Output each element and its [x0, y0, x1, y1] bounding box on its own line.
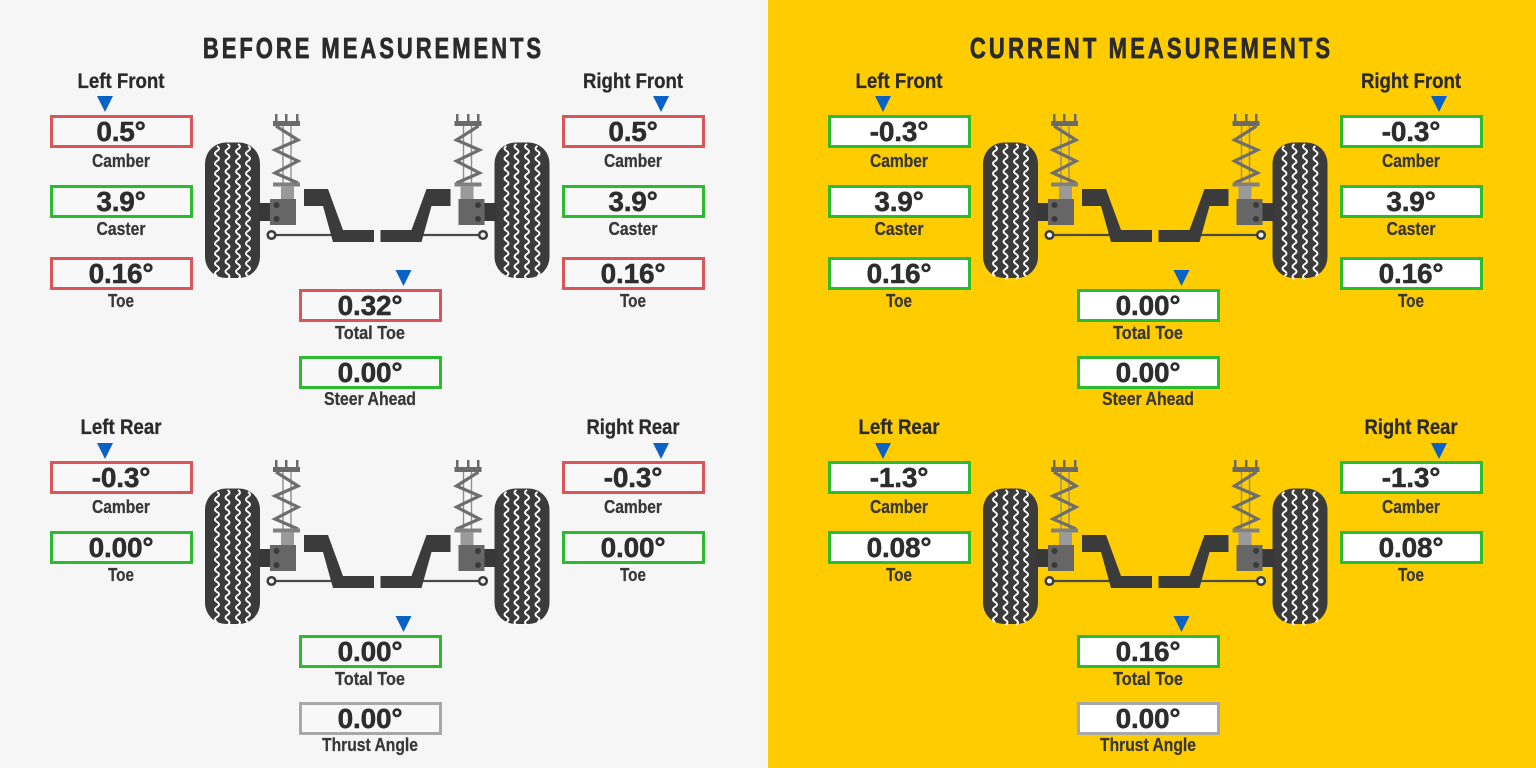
metric: right rear camber: Camber	[1382, 496, 1440, 517]
arrow: right front	[653, 96, 669, 112]
metric: thrust angle: 0.00°	[338, 703, 402, 734]
metric: right front camber: -0.3°	[1382, 116, 1440, 147]
metric: left rear toe: Toe	[108, 564, 134, 585]
illustration: rear axle	[983, 460, 1328, 625]
metric: left front camber: Camber	[870, 150, 928, 171]
metric: right front toe: Toe	[1398, 290, 1424, 311]
metric: left rear camber: -1.3°	[870, 462, 928, 493]
metric: thrust angle: Thrust Angle	[1100, 734, 1196, 755]
metric: right front caster	[564, 186, 704, 239]
metric: steer ahead	[1078, 357, 1218, 409]
metric: left front toe: Toe	[886, 290, 912, 311]
metric: steer ahead: Steer Ahead	[324, 388, 416, 409]
metric: left front caster: Caster	[96, 218, 146, 239]
title: before measurements: BEFORE MEASUREMENTS	[203, 33, 541, 65]
metric: left front caster: Caster	[874, 218, 924, 239]
arrow: left rear	[97, 443, 113, 459]
heading: left front: Left Front	[78, 69, 164, 93]
metric: left rear camber	[52, 462, 192, 517]
metric: steer ahead: 0.00°	[338, 357, 402, 388]
metric: left rear camber	[830, 462, 970, 517]
metric: rear total toe: Total Toe	[1113, 668, 1183, 689]
illustration: rear axle	[205, 460, 550, 625]
metric: front total toe: Total Toe	[1113, 322, 1183, 343]
arrow: rear total toe	[1174, 616, 1190, 632]
metric: right front toe	[1342, 258, 1482, 311]
metric: rear total toe	[300, 636, 440, 689]
metric: right rear toe	[564, 532, 704, 585]
panel: before measurements	[0, 0, 768, 768]
metric: front total toe	[1078, 290, 1218, 343]
arrow: front total toe	[396, 270, 412, 286]
metric: right front camber: 0.5°	[608, 116, 658, 147]
metric: left rear camber: Camber	[92, 496, 150, 517]
metric: right front toe: Toe	[620, 290, 646, 311]
metric: right front caster: 3.9°	[608, 186, 658, 217]
metric: left front caster: 3.9°	[874, 186, 924, 217]
metric: rear total toe: Total Toe	[335, 668, 405, 689]
metric: left front camber	[52, 116, 192, 171]
metric: left rear camber: -0.3°	[92, 462, 150, 493]
metric: steer ahead: Steer Ahead	[1102, 388, 1194, 409]
heading: right rear: Right Rear	[586, 415, 680, 439]
metric: left front caster: 3.9°	[96, 186, 146, 217]
metric: left rear toe: 0.08°	[867, 532, 931, 563]
metric: right front camber	[1342, 116, 1482, 171]
arrow: front total toe	[1174, 270, 1190, 286]
panel background: before	[0, 0, 768, 768]
metric: front total toe	[300, 290, 440, 343]
metric: right front camber: Camber	[604, 150, 662, 171]
heading: left front: Left Front	[856, 69, 942, 93]
metric: right front toe: 0.16°	[601, 258, 665, 289]
arrow: right front	[1431, 96, 1447, 112]
heading: left rear: Left Rear	[80, 415, 162, 439]
metric: right front caster: Caster	[1386, 218, 1436, 239]
metric: left front caster	[830, 186, 970, 239]
metric: left front toe: Toe	[108, 290, 134, 311]
metric: front total toe: 0.00°	[1116, 290, 1180, 321]
metric: front total toe: Total Toe	[335, 322, 405, 343]
heading: right front: Right Front	[1361, 69, 1461, 93]
arrow: left rear	[875, 443, 891, 459]
metric: thrust angle: Thrust Angle	[322, 734, 418, 755]
metric: right rear camber: -0.3°	[604, 462, 662, 493]
illustration: front axle	[983, 114, 1328, 279]
arrow: right rear	[653, 443, 669, 459]
arrow: left front	[875, 96, 891, 112]
metric: right front caster: Caster	[608, 218, 658, 239]
metric: right rear camber	[1342, 462, 1482, 517]
metric: front total toe: 0.32°	[338, 290, 402, 321]
metric: left front caster	[52, 186, 192, 239]
metric: right rear toe: Toe	[620, 564, 646, 585]
metric: right rear toe: 0.08°	[1379, 532, 1443, 563]
panel background: current	[768, 0, 1536, 768]
metric: rear total toe: 0.16°	[1116, 636, 1180, 667]
metric: left front camber: 0.5°	[96, 116, 146, 147]
metric: left front toe	[830, 258, 970, 311]
heading: left rear: Left Rear	[858, 415, 940, 439]
heading: right front: Right Front	[583, 69, 683, 93]
metric: left front camber: Camber	[92, 150, 150, 171]
metric: right front camber	[564, 116, 704, 171]
metric: right rear toe: 0.00°	[601, 532, 665, 563]
metric: left rear toe: 0.00°	[89, 532, 153, 563]
metric: thrust angle: 0.00°	[1116, 703, 1180, 734]
metric: left front toe: 0.16°	[89, 258, 153, 289]
metric: left rear toe	[52, 532, 192, 585]
metric: thrust angle	[1078, 703, 1218, 755]
metric: left front camber	[830, 116, 970, 171]
metric: right rear camber	[564, 462, 704, 517]
metric: left front toe: 0.16°	[867, 258, 931, 289]
heading: right rear: Right Rear	[1364, 415, 1458, 439]
metric: right rear camber: -1.3°	[1382, 462, 1440, 493]
metric: right rear camber: Camber	[604, 496, 662, 517]
metric: rear total toe: 0.00°	[338, 636, 402, 667]
metric: right front camber: Camber	[1382, 150, 1440, 171]
illustration: front axle	[205, 114, 550, 279]
metric: steer ahead	[300, 357, 440, 409]
metric: left rear camber: Camber	[870, 496, 928, 517]
metric: right front toe: 0.16°	[1379, 258, 1443, 289]
panel: current measurements	[768, 0, 1536, 768]
arrow: left front	[97, 96, 113, 112]
metric: left front camber: -0.3°	[870, 116, 928, 147]
metric: right front toe	[564, 258, 704, 311]
metric: right rear toe	[1342, 532, 1482, 585]
arrow: right rear	[1431, 443, 1447, 459]
arrow: rear total toe	[396, 616, 412, 632]
metric: steer ahead: 0.00°	[1116, 357, 1180, 388]
metric: right front caster: 3.9°	[1386, 186, 1436, 217]
metric: rear total toe	[1078, 636, 1218, 689]
metric: right front caster	[1342, 186, 1482, 239]
metric: left front toe	[52, 258, 192, 311]
title: current measurements: CURRENT MEASUREMENTS	[970, 33, 1330, 65]
metric: thrust angle	[300, 703, 440, 755]
metric: right rear toe: Toe	[1398, 564, 1424, 585]
metric: left rear toe: Toe	[886, 564, 912, 585]
metric: left rear toe	[830, 532, 970, 585]
